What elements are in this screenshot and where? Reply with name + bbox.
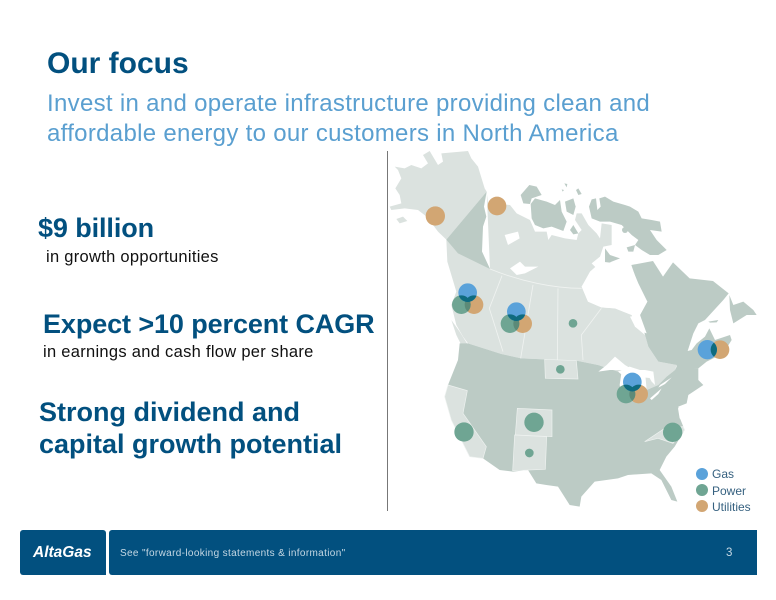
heading: dividend <box>39 397 342 459</box>
marker group: Michigan <box>617 373 648 403</box>
legend item: Power: Power <box>712 484 746 498</box>
map: highlighted US states <box>445 359 685 471</box>
marker: Colorado power <box>524 413 544 432</box>
marker: Northwest Territories utilities <box>488 197 506 215</box>
marker group: Alberta <box>501 302 532 333</box>
footer logo panel <box>20 530 106 575</box>
marker group: Nova Scotia <box>698 340 729 359</box>
marker: Alaska utilities <box>426 206 445 226</box>
heading: CAGR: Expect >10 percent CAGR <box>43 309 375 339</box>
logo: AltaGas: AltaGas <box>33 544 92 561</box>
map: lakes and bays <box>505 232 685 422</box>
title: Our focus <box>47 47 189 80</box>
map: Arctic islands <box>521 183 667 271</box>
footer bar <box>109 530 757 575</box>
page number: 3 <box>726 547 732 559</box>
marker group: British Columbia <box>452 283 483 314</box>
marker: North Dakota power <box>556 365 565 374</box>
legend item: Gas: Gas <box>712 467 734 481</box>
footer note: See "forward-looking statements & information" <box>120 548 346 559</box>
map of North America <box>390 151 756 512</box>
map: Canada and Alaska light regions <box>390 151 677 390</box>
legend item: Utilities: Utilities <box>712 500 751 514</box>
legend <box>696 467 751 514</box>
marker: Saskatchewan power <box>569 319 577 328</box>
heading: dividend: Strong dividend and <box>39 397 300 427</box>
map: Yukon, Quebec and eastern Canada dark regions <box>446 192 757 507</box>
subtitle: Invest in and operate infrastructure providing clean and <box>47 90 650 117</box>
subtitle: affordable energy to our customers in North America <box>47 120 619 147</box>
text: growth opportunities: in growth opportunities <box>46 248 219 266</box>
text: earnings: in earnings and cash flow per share <box>43 343 314 361</box>
heading: dividend: capital growth potential <box>39 429 342 459</box>
marker: North Carolina power <box>663 423 682 442</box>
subtitle <box>47 90 650 147</box>
map: provincial borders <box>489 269 601 360</box>
marker: California power <box>454 422 474 442</box>
heading: growth opportunities: $9 billion <box>38 213 154 243</box>
vertical divider <box>387 151 388 511</box>
marker: New Mexico power <box>525 449 534 457</box>
map: Foxe Basin island <box>622 227 628 233</box>
